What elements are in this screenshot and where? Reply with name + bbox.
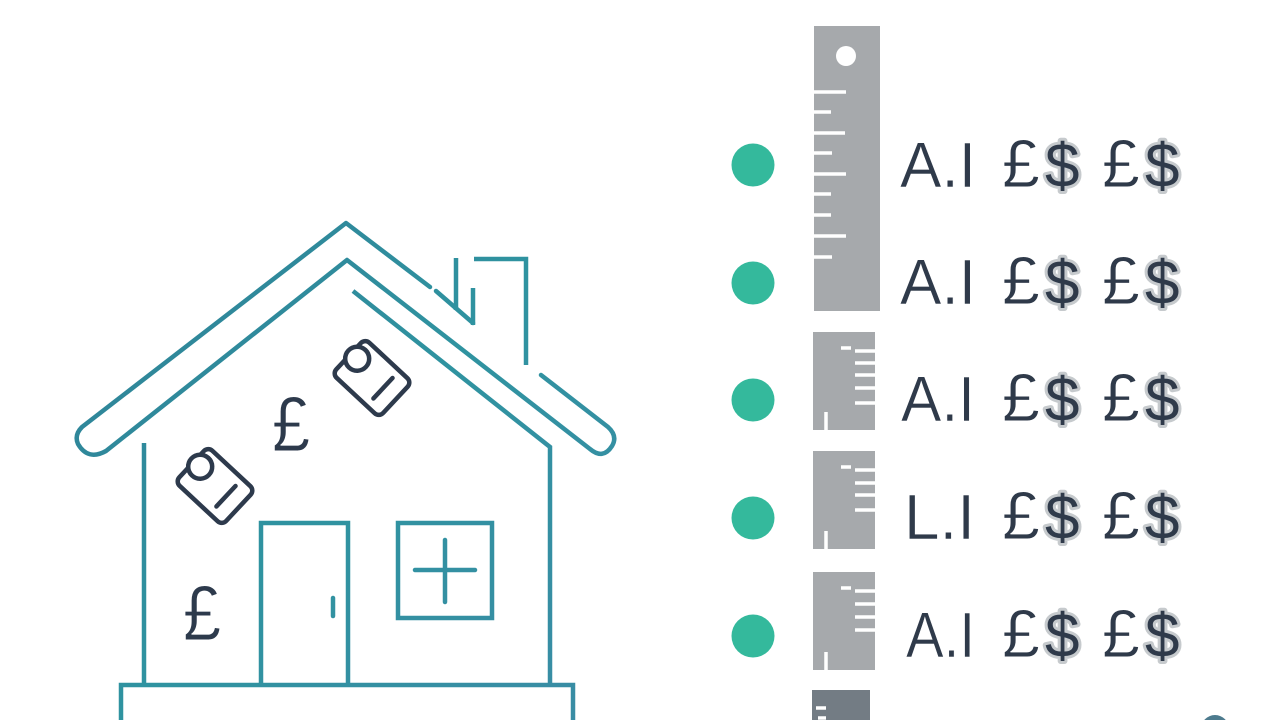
pound symbol lower: £ (183, 569, 221, 657)
list row 4: L.I (904, 481, 975, 553)
panel: price list (732, 26, 1229, 720)
list row 2: $ (1045, 249, 1079, 318)
window cross (415, 540, 475, 602)
list row 5: £ (1002, 596, 1040, 672)
list row 2: £ (1102, 243, 1140, 319)
list row 1 (732, 126, 1179, 202)
list row 1: £ (1102, 126, 1140, 202)
ruler small 1 (813, 332, 875, 430)
ruler small 4 (812, 690, 870, 720)
price tag upper (329, 336, 412, 417)
left wall (142, 443, 146, 685)
roof right upper segment (436, 291, 473, 323)
list row 4: £ (1102, 478, 1140, 554)
list row 5: $ (1145, 602, 1179, 671)
inner roof line and right wall (353, 291, 550, 685)
list row 2: A.I (900, 246, 976, 318)
list row 1: A.I (900, 129, 976, 201)
list row 4: $ (1145, 484, 1179, 553)
list row 3: $ (1045, 366, 1079, 435)
price tag lower (172, 444, 255, 525)
list row 2 (732, 243, 1179, 319)
list row 4 (732, 478, 1179, 554)
list row 3 (732, 360, 1179, 436)
pound symbol upper: £ (272, 380, 310, 468)
house base (121, 685, 573, 720)
chimney (456, 258, 526, 365)
list row 4: £ (1002, 478, 1040, 554)
ruler small 2 (813, 451, 875, 549)
list row 1: $ (1045, 132, 1079, 201)
list row 3: £ (1102, 360, 1140, 436)
list row 5: A.I (906, 599, 975, 671)
door (261, 523, 348, 685)
window (398, 523, 492, 618)
list row 5: £ (1102, 596, 1140, 672)
list row 3: $ (1145, 366, 1179, 435)
list row 2: £ (1002, 243, 1040, 319)
house roof (77, 223, 614, 455)
icon: house (77, 223, 614, 720)
list row 4: $ (1045, 484, 1079, 553)
ruler small 3 (813, 572, 875, 670)
ruler tall (814, 26, 880, 311)
list row 3: A.I (901, 363, 975, 435)
partial dot at bottom edge (1201, 715, 1229, 720)
list row 5: $ (1045, 602, 1079, 671)
list row 1: £ (1002, 126, 1040, 202)
list row 2: $ (1145, 249, 1179, 318)
list row 3: £ (1002, 360, 1040, 436)
list row 5 (732, 596, 1179, 672)
door handle (331, 598, 335, 616)
list row 1: $ (1145, 132, 1179, 201)
